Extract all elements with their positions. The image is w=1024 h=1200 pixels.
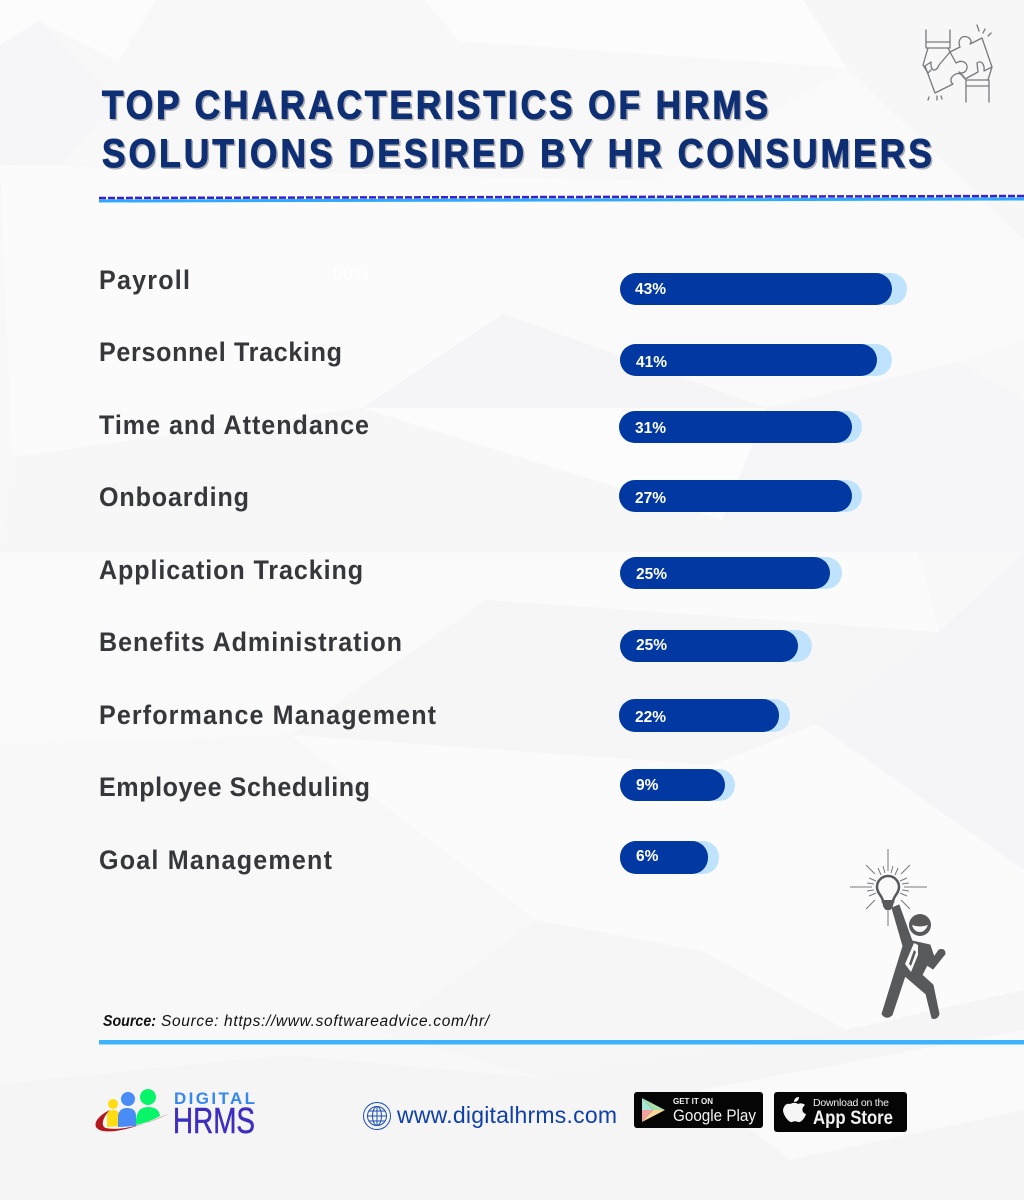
row: Personnel Tracking: 41% xyxy=(636,354,667,371)
row: Employee Scheduling xyxy=(99,769,735,802)
website link with globe icon: www.digitalhrms.com xyxy=(396,1102,617,1128)
source note: Source: https://www.softwareadvice.com/hr/ xyxy=(161,1013,491,1030)
title: SOLUTIONS DESIRED BY HR CONSUMERS xyxy=(102,131,932,175)
badge: Google Play: GET IT ON xyxy=(673,1097,713,1106)
row: Payroll: Payroll xyxy=(99,264,190,295)
badge: App Store: App Store xyxy=(813,1108,893,1129)
row: Payroll: 43% xyxy=(635,281,666,298)
row: Goal Management: Goal Management xyxy=(99,844,332,875)
source note: Source: xyxy=(103,1013,156,1030)
row: Application Tracking xyxy=(99,554,842,589)
badge: Google Play: Google Play xyxy=(673,1106,756,1125)
figure body xyxy=(882,905,945,1018)
logo: Digital HRMS xyxy=(95,1089,255,1141)
row: Time and Attendance xyxy=(99,409,862,443)
title: TOP CHARACTERISTICS OF HRMS xyxy=(102,82,768,127)
badge: App Store: Download on the xyxy=(813,1097,889,1109)
row: Performance Management xyxy=(99,699,790,732)
logo: Digital HRMS: DIGITAL xyxy=(174,1089,255,1108)
badge: App Store xyxy=(774,1092,907,1132)
row: Personnel Tracking xyxy=(99,336,892,376)
row: Time and Attendance: 31% xyxy=(635,420,666,437)
faint stray label: 90% xyxy=(333,264,369,284)
row: Personnel Tracking: Personnel Tracking xyxy=(99,336,342,367)
row: Payroll xyxy=(99,264,907,305)
row: Benefits Administration: 25% xyxy=(636,637,667,654)
row: Application Tracking: 25% xyxy=(636,566,667,583)
row: Time and Attendance: Time and Attendance xyxy=(99,409,369,440)
title divider xyxy=(99,196,1024,201)
row: Employee Scheduling: 9% xyxy=(636,777,659,794)
row: Employee Scheduling: Employee Scheduling xyxy=(99,771,370,802)
icon: person reaching for light bulb xyxy=(850,849,945,1018)
row: Goal Management xyxy=(99,841,719,875)
icon: hands holding puzzle pieces xyxy=(923,25,992,102)
row: Benefits Administration xyxy=(99,626,812,662)
title: TOP CHARACTERISTICS OF HRMS xyxy=(104,84,770,128)
row: Application Tracking: Application Tracking xyxy=(99,554,363,585)
row: Performance Management: 22% xyxy=(635,709,666,726)
row: Onboarding xyxy=(99,480,862,512)
logo: Digital HRMS: HRMS xyxy=(173,1100,255,1141)
title xyxy=(102,82,933,177)
row: Goal Management: 6% xyxy=(636,848,659,865)
bar chart: desired HRMS characteristics xyxy=(99,264,907,875)
badge: Google Play xyxy=(634,1092,763,1128)
row: Performance Management: Performance Management xyxy=(99,699,436,730)
title: SOLUTIONS DESIRED BY HR CONSUMERS xyxy=(104,132,933,177)
row: Benefits Administration: Benefits Administration xyxy=(99,626,402,657)
footer divider xyxy=(99,1040,1024,1044)
row: Onboarding: Onboarding xyxy=(99,481,249,512)
row: Onboarding: 27% xyxy=(635,490,666,507)
